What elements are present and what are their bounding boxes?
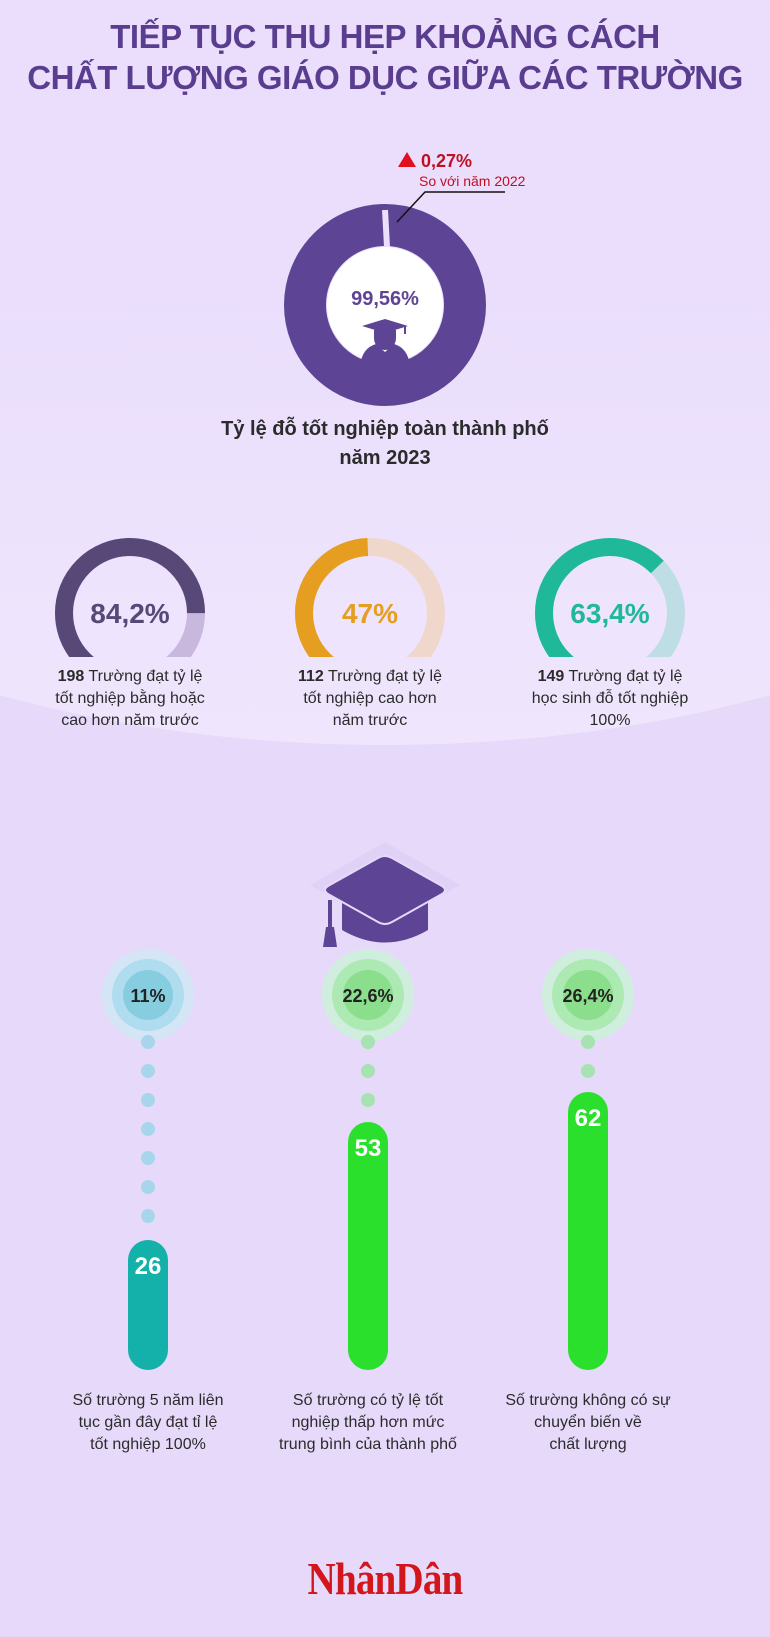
bar label 2: Số trường có tỷ lệ tốt xyxy=(293,1392,443,1409)
chart: bars with dots: 22,6% xyxy=(342,986,394,1006)
label 3: học sinh đỗ tốt nghiệp xyxy=(532,690,688,707)
icon: graduation cap xyxy=(323,857,444,947)
label 2: 112 Trường đạt tỷ lệ xyxy=(298,668,442,685)
chart: bars with dots: 26,4% xyxy=(562,986,614,1006)
caption xyxy=(221,416,549,469)
logo: NhânDân xyxy=(308,1553,462,1604)
title: TIẾP TỤC THU HẸP KHOẢNG CÁCH xyxy=(110,18,660,55)
bar label 2: nghiệp thấp hơn mức xyxy=(292,1414,444,1431)
label 3: 149 Trường đạt tỷ lệ xyxy=(538,668,682,685)
bar label 3: chất lượng xyxy=(549,1436,627,1453)
bar label 3: chuyển biến về xyxy=(534,1414,642,1431)
chart: bars with dots: 26 xyxy=(135,1253,161,1280)
bar label 1: tục gần đây đạt tỉ lệ xyxy=(79,1414,217,1431)
bar label 2 xyxy=(279,1392,457,1453)
caption: năm 2023 xyxy=(339,447,431,469)
label 1: tốt nghiệp bằng hoặc xyxy=(55,690,205,707)
chart: main donut: 0,27% xyxy=(421,151,472,171)
chart: bars with dots: 62 xyxy=(575,1105,601,1132)
chart: main donut: So với năm 2022 xyxy=(419,173,526,189)
chart: three gauge donuts: 84,2% xyxy=(90,598,170,629)
bar label 3 xyxy=(505,1392,671,1453)
chart: bars with dots: 11% xyxy=(130,986,166,1006)
label 2 xyxy=(298,668,442,729)
label 2: năm trước xyxy=(333,712,407,729)
chart: three gauge donuts: 47% xyxy=(342,598,398,629)
label 3 xyxy=(532,668,688,729)
chart: bars with dots xyxy=(102,949,634,1370)
title xyxy=(27,18,743,96)
caption: Tỷ lệ đỗ tốt nghiệp toàn thành phố xyxy=(221,418,549,440)
label 1: 198 Trường đạt tỷ lệ xyxy=(58,668,202,685)
chart: main donut: 99,56% xyxy=(351,288,419,310)
label 2: tốt nghiệp cao hơn xyxy=(303,690,437,707)
bar label 1 xyxy=(72,1392,224,1453)
label 1: cao hơn năm trước xyxy=(61,712,199,729)
chart: three gauge donuts xyxy=(55,538,685,657)
label 1 xyxy=(55,668,205,729)
bar label 2: trung bình của thành phố xyxy=(279,1436,457,1453)
chart: bars with dots: 53 xyxy=(355,1135,381,1162)
label 3: 100% xyxy=(590,712,630,729)
chart: three gauge donuts: 63,4% xyxy=(570,598,650,629)
bar label 1: Số trường 5 năm liên xyxy=(72,1392,224,1409)
bar label 1: tốt nghiệp 100% xyxy=(90,1436,206,1453)
bar label 3: Số trường không có sự xyxy=(505,1392,671,1409)
title: CHẤT LƯỢNG GIÁO DỤC GIỮA CÁC TRƯỜNG xyxy=(27,59,743,96)
chart: main donut xyxy=(284,151,526,406)
